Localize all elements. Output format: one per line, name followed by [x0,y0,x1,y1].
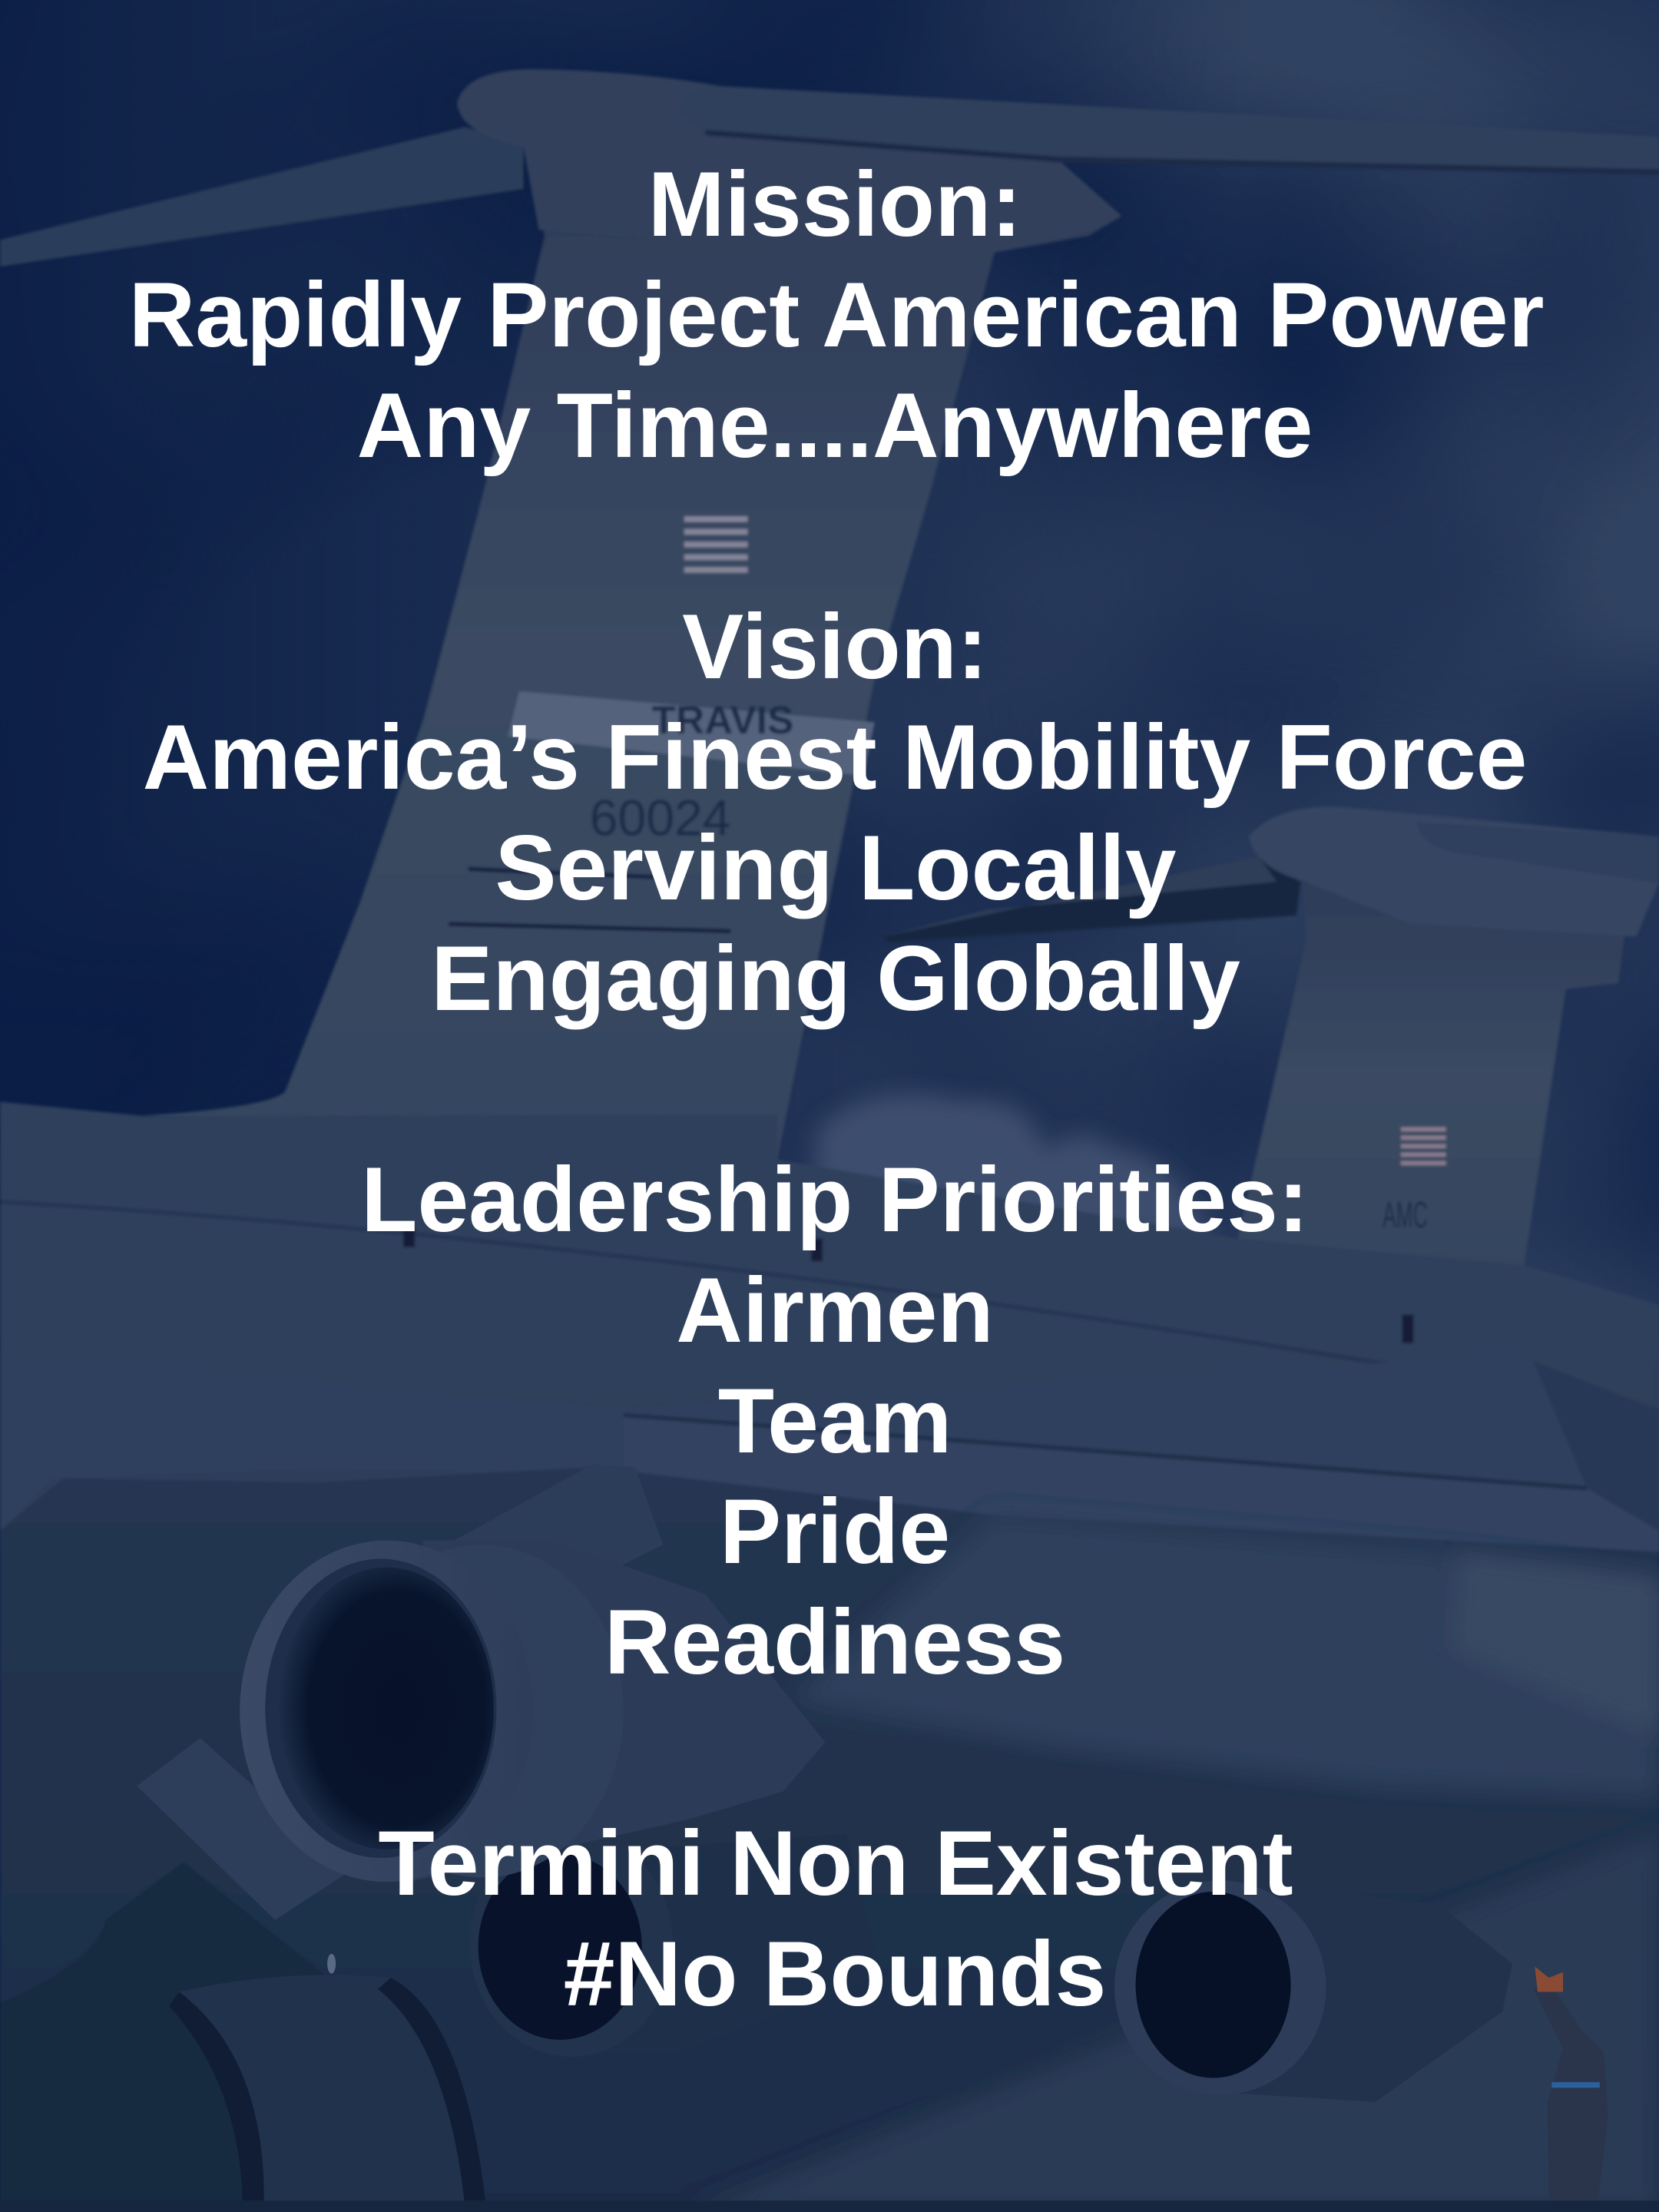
text: mission: Rapidly Project American Power [129,263,1544,366]
text: leadership priorities: Leadership Priorities: [361,1148,1309,1251]
text: vision: Serving Locally [495,816,1177,919]
main tail fin: 60024 [590,790,731,846]
flag on rear tail [1401,1128,1446,1165]
text: motto [378,1812,1293,2025]
main tail fin: TRAVIS [652,697,793,742]
text: leadership priorities: Team [718,1369,952,1472]
flag on main tail [684,516,747,573]
lower wing surface [0,1467,1659,2212]
text: mission: Any Time....Anywhere [357,374,1313,477]
text: motto: Termini Non Existent [378,1812,1293,1915]
text: leadership priorities [361,1148,1309,1694]
text: leadership priorities: Pride [720,1480,950,1583]
text: vision [143,595,1527,1030]
text: mission [129,153,1544,477]
text: leadership priorities: Airmen [676,1259,994,1362]
text: vision: Engaging Globally [431,927,1240,1030]
rear tail fin: AMC [1382,1195,1428,1236]
engine: rear centre [470,1831,882,2057]
engine: large front [240,1464,825,1882]
flap fairing [137,1738,349,1920]
main tail fin [0,69,1659,1160]
engine: right [1114,1880,1512,2102]
panel marks on wing [403,1227,415,1247]
clouds [281,0,1659,1550]
ground crew member [1533,1966,1608,2212]
text: leadership priorities: Readiness [604,1591,1065,1694]
text: mission: Mission: [648,153,1022,256]
text: motto: #No Bounds [564,1922,1106,2025]
fuselage and wing [0,1101,1659,2212]
text: vision: America’s Finest Mobility Force [143,706,1527,809]
rear tail fin [883,806,1659,1270]
landing gear fairings [169,1954,487,2212]
text: vision: Vision: [682,595,988,698]
